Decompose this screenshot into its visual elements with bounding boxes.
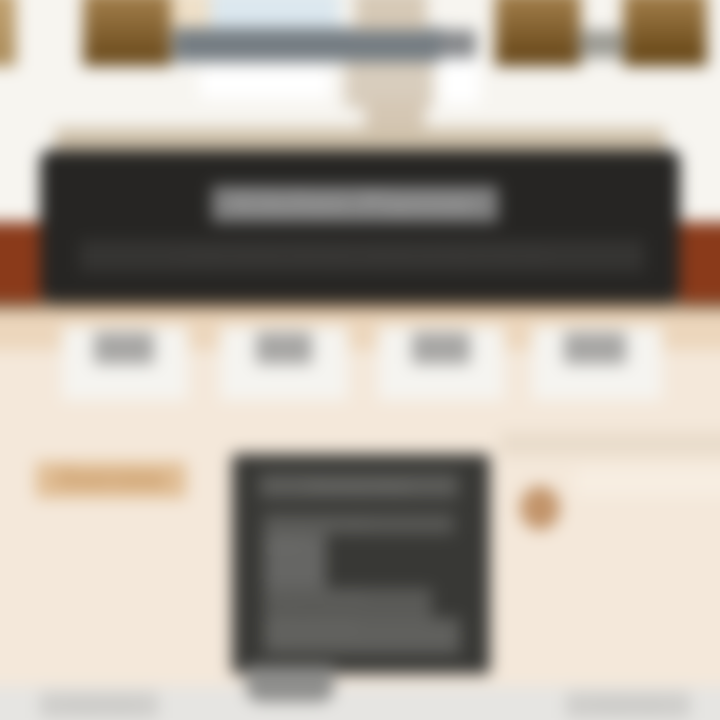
hero subtitle xyxy=(80,240,644,272)
hero subtitle: A simple overview of the layout, materials and steps for the room xyxy=(176,248,548,263)
step line 2 xyxy=(264,588,432,618)
tan band xyxy=(0,310,720,350)
background: cream wall xyxy=(0,310,720,720)
white highlight xyxy=(440,58,480,104)
left label xyxy=(36,462,186,498)
faucet top xyxy=(355,0,427,30)
steps heading: Planning Steps xyxy=(308,478,410,494)
kitchen scene: top cabinets and window xyxy=(0,0,720,136)
step line 3 xyxy=(264,618,460,654)
card 1 label xyxy=(94,332,154,364)
steps heading xyxy=(260,474,458,498)
warm wall patch xyxy=(168,0,210,30)
background: upper white kitchen xyxy=(0,0,720,230)
shelf strip xyxy=(173,28,443,62)
card 4 xyxy=(532,326,662,400)
cabinet 1 xyxy=(0,0,16,66)
panel: steps xyxy=(232,454,490,674)
card 2 xyxy=(220,326,348,400)
cabinet 3 xyxy=(495,0,581,66)
cabinet 2 xyxy=(83,0,171,66)
step block left xyxy=(264,534,326,588)
faucet body xyxy=(345,62,433,108)
step line 2: Choose materials xyxy=(264,589,365,604)
card 4 label xyxy=(564,332,626,364)
counter edge xyxy=(0,302,720,310)
card 2 label: Storage xyxy=(260,340,308,355)
card 1 xyxy=(62,326,188,400)
footer item left: Footer note xyxy=(66,697,132,712)
cabinet 4 xyxy=(623,0,707,66)
steps text xyxy=(257,508,466,660)
hero title: Kitchen Planner xyxy=(233,187,477,220)
card 3 label: Lighting xyxy=(415,340,467,355)
card 4 label: Finishes xyxy=(569,340,621,355)
footer item left xyxy=(40,692,158,718)
shelf strip between cabinets xyxy=(579,30,625,58)
counter shadow xyxy=(55,128,665,152)
footer item right xyxy=(566,692,690,718)
brick side right xyxy=(678,222,720,310)
faucet stem xyxy=(365,100,425,132)
card 3 xyxy=(378,326,504,400)
panel tab xyxy=(246,666,334,702)
step line 1: Measure the room xyxy=(264,516,370,531)
left label: Overview xyxy=(58,466,164,493)
window xyxy=(210,0,340,30)
footer item right: Footer note xyxy=(595,697,661,712)
brick side left xyxy=(0,222,42,310)
step block left: Sketch xyxy=(264,535,304,550)
card 2 label xyxy=(256,332,312,364)
card 3 label xyxy=(412,332,470,364)
footer strip xyxy=(0,686,720,720)
right column header band xyxy=(500,432,720,456)
panel: hero xyxy=(40,150,680,302)
step line 1 xyxy=(264,514,454,534)
marker circle xyxy=(520,486,560,530)
white highlight left xyxy=(200,65,330,99)
shelf strip right part xyxy=(440,30,476,60)
step line 3: Install and finish xyxy=(264,619,357,634)
right note band xyxy=(575,468,720,496)
card 1 label: Layout xyxy=(103,340,145,355)
